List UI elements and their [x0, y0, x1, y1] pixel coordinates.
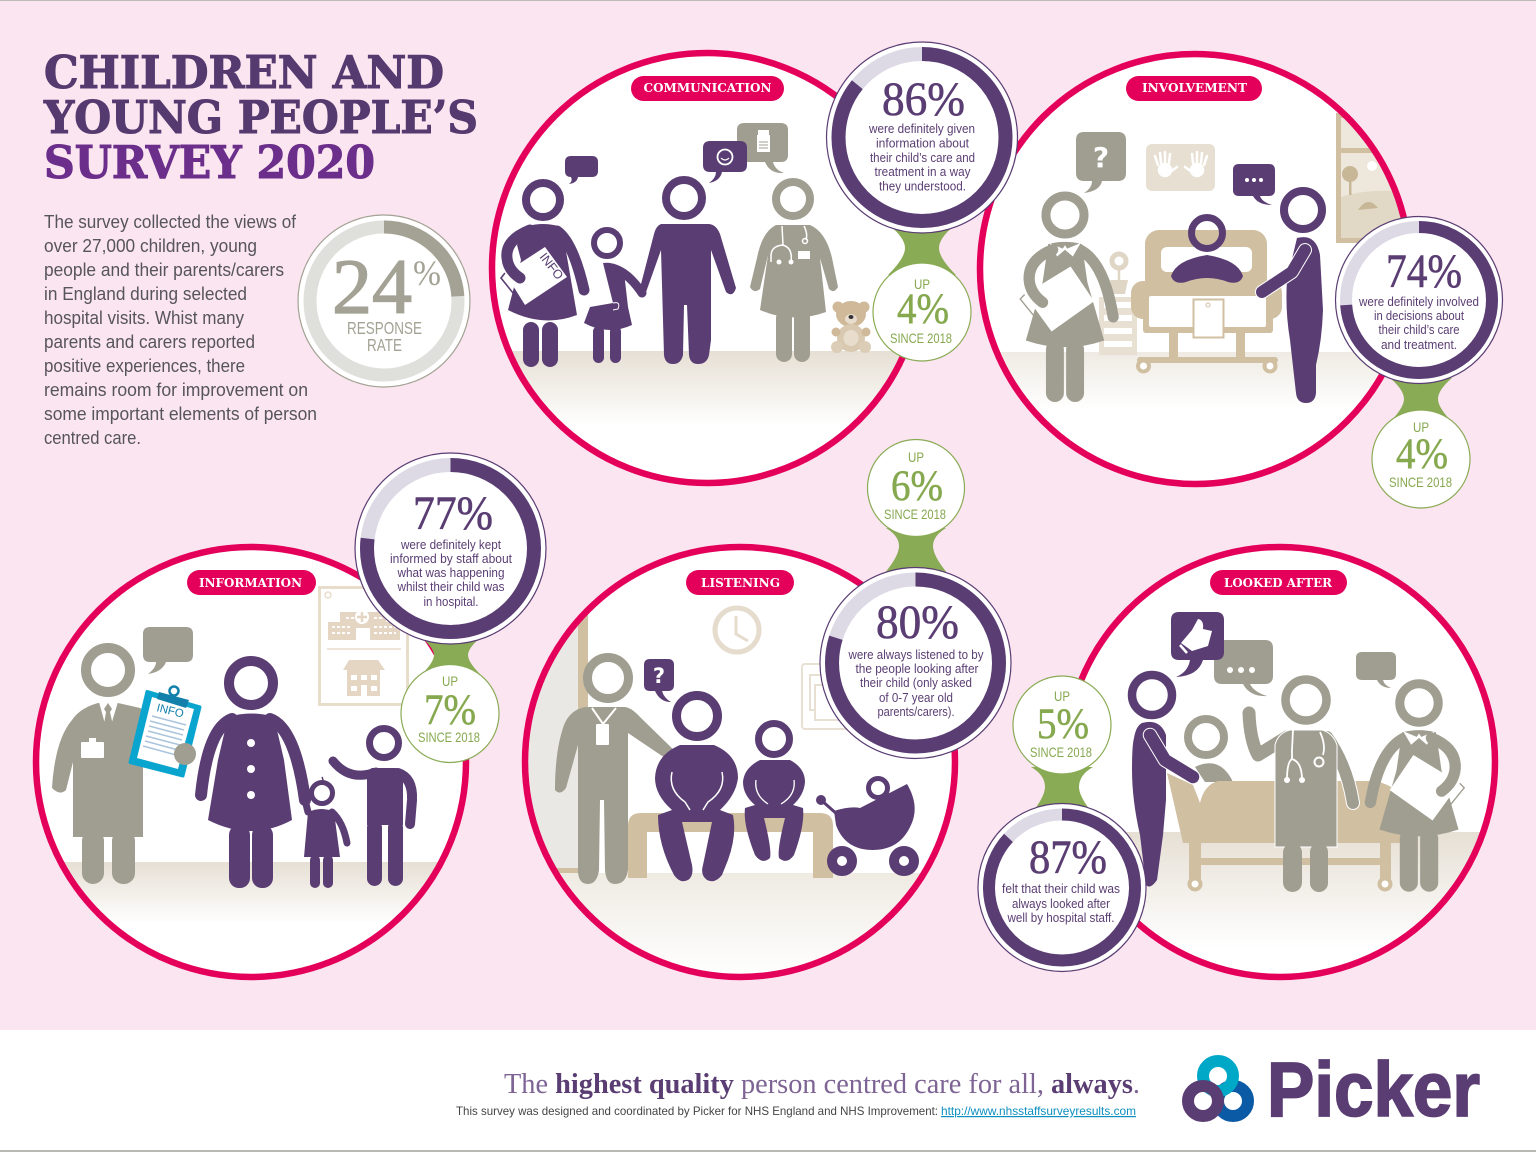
floor [1126, 832, 1480, 926]
ring 77%: what was happening [397, 566, 505, 580]
ring 77%: were definitely kept [400, 538, 501, 552]
intro text block: parents and carers reported [44, 332, 255, 352]
intro text block: positive experiences, there [44, 356, 245, 376]
stat: information 77% up 7% [355, 453, 546, 762]
figure: child in bed [1171, 218, 1243, 283]
figure: mother in coat [201, 661, 305, 888]
bubble up 4% [1372, 410, 1470, 508]
stat: involvement 74% up 4% [1336, 216, 1502, 508]
label pill: COMMUNICATION [644, 80, 772, 95]
ring 86%: information about [876, 136, 970, 150]
speech bubble: question [1076, 132, 1126, 193]
bubble up 4%: 4% [1396, 431, 1448, 478]
connector [418, 636, 484, 678]
figure: girl holding hand [584, 230, 642, 363]
speech bubble: staff [143, 627, 193, 674]
intro text block: centred care. [44, 428, 141, 448]
connector [1030, 767, 1094, 815]
panel: involvement [970, 54, 1420, 484]
label pill: INFORMATION [199, 575, 302, 590]
icon: picker logo rings [1188, 1061, 1248, 1116]
bubble up 4% [873, 263, 971, 361]
floor [1000, 352, 1379, 394]
figure: father standing [1262, 191, 1323, 403]
ring 80%: of 0-7 year old [879, 691, 953, 705]
intro text block: people and their parents/carers [44, 260, 284, 280]
figure: nurse with clipboard [1370, 684, 1464, 892]
figure: mother with folder [501, 183, 584, 367]
figure: staff member with lanyard [555, 658, 682, 884]
response rate ring: 24%: % [413, 253, 441, 293]
logo wordmark: Picker [1267, 1047, 1480, 1133]
ring 77%: in hospital. [424, 595, 478, 609]
bubble up 5%: 5% [1037, 701, 1089, 748]
title: SURVEY 2020 [44, 136, 375, 189]
ring 74% [1336, 216, 1502, 384]
ring 80%: their child (only asked [860, 676, 972, 690]
stat: listening 80% up 6% [820, 440, 1011, 758]
panel: communication [480, 53, 940, 483]
ring 80%: parents/carers). [878, 705, 954, 719]
response rate ring: 24% [298, 215, 470, 387]
bedside drawers and flower [1099, 254, 1137, 355]
bubble up 4%: UP [1413, 419, 1429, 435]
figure: seated child [743, 724, 805, 861]
bubble up 6%: 6% [891, 463, 943, 510]
response rate ring: 24%: RATE [367, 335, 402, 355]
figure: seated mother [655, 696, 738, 881]
ring 80%: the people looking after [856, 662, 978, 676]
intro text block: in England during selected [44, 284, 247, 304]
figure: toddler [304, 777, 347, 888]
figure: doctor [750, 182, 838, 362]
ring 74%: in decisions about [1374, 309, 1464, 323]
ring 86%: were definitely given [868, 122, 975, 136]
icon: teddy bear [831, 301, 871, 353]
bench [628, 813, 833, 878]
wall and floor [528, 614, 920, 948]
label pill: LISTENING [701, 575, 780, 590]
wall picture: hand prints [1146, 144, 1215, 191]
bubble up 4%: SINCE 2018 [890, 330, 952, 346]
speech bubble: thumbs up [1171, 612, 1224, 677]
label pill: LOOKED AFTER [1224, 575, 1333, 590]
intro text block [44, 212, 317, 448]
ring 74%: their child’s care [1378, 323, 1460, 337]
connector [884, 528, 948, 574]
ring 77%: informed by staff about [390, 552, 512, 566]
ring 86%: they understood. [879, 180, 966, 194]
speech bubble: question [644, 659, 674, 702]
ring 74%: were definitely involved [1358, 295, 1479, 309]
response rate ring: 24%: 24 [332, 243, 412, 330]
ring 86%: their child’s care and [870, 151, 975, 165]
figure: nurse with clipboard [1020, 196, 1113, 402]
figure: father [639, 180, 736, 364]
hospital bed [1131, 230, 1282, 372]
floor [512, 351, 900, 412]
figure: doctor waving [1249, 680, 1353, 892]
intro text block: remains room for improvement on [44, 380, 308, 400]
speech bubble: question: ? [1093, 141, 1109, 174]
title: CHILDREN AND [44, 46, 444, 99]
bubble up 4%: UP [914, 276, 930, 292]
intro text block: hospital visits. Whist many [44, 308, 244, 328]
bubble up 6%: SINCE 2018 [884, 506, 946, 522]
ring 80%: 80% [876, 596, 959, 649]
figure: mother with folder: INFO [537, 250, 566, 283]
ring 87%: felt that their child was [1002, 882, 1120, 896]
wall picture frame [802, 664, 852, 729]
ring 86%: 86% [882, 73, 965, 126]
speech bubble: ellipsis [1233, 164, 1275, 205]
bubble up 7%: UP [442, 673, 458, 689]
clipboard: info: INFO [155, 702, 185, 721]
bubble up 4%: SINCE 2018 [1389, 474, 1452, 490]
credit line: This survey was designed and coordinated by Picker for NHS England and NHS Improvement: [456, 1104, 938, 1118]
icon: pram [816, 778, 915, 871]
ring 87% [978, 804, 1146, 972]
ring 74%: 74% [1386, 245, 1462, 298]
label pill [1126, 76, 1262, 101]
figure: staff member with clipboard [52, 648, 155, 884]
speech bubble: medicine bottle [737, 123, 788, 173]
label pill [631, 76, 784, 101]
clipboard: info [130, 686, 200, 776]
ring 87%: well by hospital staff. [1007, 911, 1114, 925]
title [43, 46, 478, 189]
speech bubble: nurse [1356, 652, 1396, 688]
ring 77%: whilst their child was [397, 580, 504, 594]
bubble up 5%: UP [1054, 688, 1070, 704]
label pill [187, 570, 316, 595]
panel: listening [520, 547, 960, 979]
intro text block: some important elements of person [44, 404, 317, 424]
label pill: INVOLVEMENT [1142, 80, 1248, 95]
panel: looked after [1060, 547, 1500, 977]
speech bubble: smile [703, 141, 747, 183]
ring 87%: 87% [1029, 831, 1107, 884]
label pill [1210, 570, 1347, 595]
speech bubble: mother [565, 156, 598, 184]
icon: wall clock [715, 608, 759, 652]
ring 86%: treatment in a way [874, 165, 971, 179]
stat: communication 86% up 4% [826, 42, 1018, 361]
figure: parent standing [1132, 675, 1193, 887]
title: YOUNG PEOPLE’S [43, 91, 478, 144]
speech bubble: question: ? [653, 664, 665, 688]
stat: looked after 87% up 5% [978, 676, 1146, 972]
speech bubble: ellipsis [1214, 640, 1273, 696]
figure: boy waving [333, 728, 412, 886]
hospital bed with patient [1167, 719, 1410, 890]
bubble up 4%: 4% [897, 286, 949, 333]
ring 80%: were always listened to by [848, 648, 984, 662]
panel: information [30, 547, 480, 977]
bubble up 7% [401, 664, 499, 762]
bubble up 6% [868, 440, 964, 536]
intro text block: over 27,000 children, young [44, 236, 257, 256]
connector [1388, 378, 1454, 424]
label pill [686, 570, 794, 595]
bubble up 5% [1013, 676, 1111, 774]
floor [64, 862, 438, 912]
ring 74%: and treatment. [1381, 338, 1457, 352]
ring 86% [826, 42, 1018, 233]
response rate ring: 24%: RESPONSE [347, 318, 422, 338]
bubble up 6%: UP [908, 449, 924, 465]
ring 80% [820, 568, 1011, 758]
ring 77%: 77% [413, 487, 493, 540]
tagline: The highest quality person centred care for all, always. [504, 1069, 1140, 1100]
ring 77% [355, 453, 546, 644]
wall chart: hospital and house [320, 588, 408, 704]
window with landscape [1336, 113, 1406, 243]
bubble up 7%: 7% [424, 687, 476, 734]
bubble up 5%: SINCE 2018 [1030, 744, 1092, 760]
ring 87%: always looked after [1012, 897, 1110, 911]
intro text block: The survey collected the views of [44, 212, 297, 232]
footer band [0, 1030, 1536, 1152]
connector [888, 225, 956, 275]
bubble up 7%: SINCE 2018 [418, 729, 480, 745]
link text: http://www.nhsstaffsurveyresults.com [941, 1104, 1136, 1118]
